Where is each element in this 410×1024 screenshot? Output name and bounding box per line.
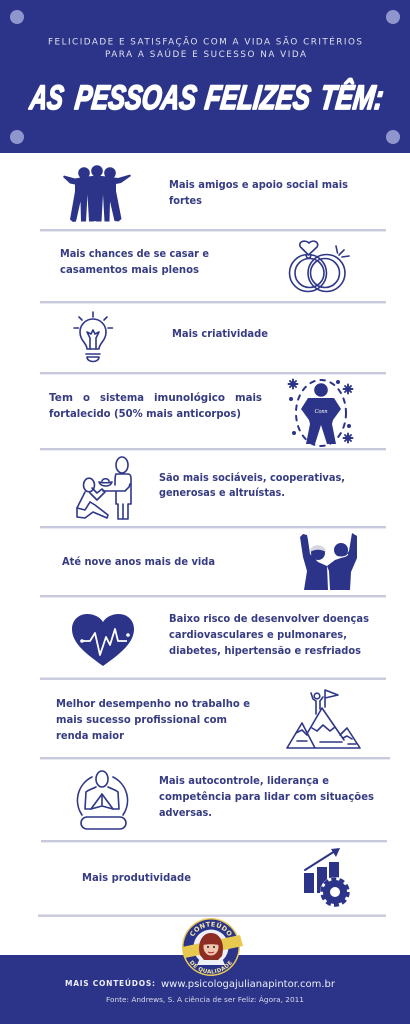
item 4: immune system bbox=[49, 380, 352, 446]
text: Mais amigos e apoio social mais bbox=[169, 179, 348, 191]
text bbox=[169, 613, 369, 657]
text: casamentos mais plenos bbox=[60, 264, 199, 276]
text: diabetes, hipertensão e resfriados bbox=[169, 645, 361, 657]
text: Mais produtividade bbox=[82, 872, 191, 884]
text: mais sucesso profissional com bbox=[56, 714, 227, 726]
text: mais bbox=[235, 392, 262, 404]
text bbox=[56, 698, 250, 742]
source: Fonte: Andrews, S. A ciência de ser Feliz: Ágora, 2011 bbox=[106, 995, 304, 1004]
icon: rising chart and gear bbox=[304, 848, 350, 907]
text: Mais autocontrole, liderança e bbox=[159, 775, 329, 787]
item 8: work bbox=[56, 690, 360, 748]
item 1: friends bbox=[63, 165, 348, 222]
subtitle: FELICIDADE E SATISFAÇÃO COM A VIDA SÃO CRITÉRIOS bbox=[48, 36, 362, 48]
text: fortalecido (50% mais anticorpos) bbox=[49, 408, 241, 420]
text: o bbox=[83, 392, 90, 404]
item 7: heart health bbox=[72, 613, 369, 666]
footer links: MAIS CONTEÚDOS: bbox=[65, 979, 155, 988]
footer links: www.psicologajulianapintor.com.br bbox=[161, 979, 336, 990]
icon: rings with heart bbox=[290, 241, 349, 292]
text: Mais chances de se casar e bbox=[60, 248, 209, 260]
text: sistema bbox=[100, 392, 144, 404]
text bbox=[49, 392, 262, 420]
text bbox=[159, 472, 345, 499]
icon: elderly couple celebrating bbox=[300, 533, 357, 590]
item 6: longevity bbox=[62, 533, 357, 590]
text: generosas e altruístas. bbox=[159, 487, 285, 499]
icon: light bulb bbox=[74, 312, 112, 362]
badge: conteúdo de qualidade bbox=[182, 918, 243, 976]
title bbox=[27, 79, 386, 117]
footer links bbox=[65, 979, 336, 990]
badge: conteúdo de qualidade: DE QUALIDADE bbox=[190, 960, 232, 974]
item 3: creativity bbox=[74, 312, 268, 362]
title: AS bbox=[27, 79, 66, 117]
icon: mountain with flag bbox=[287, 690, 360, 748]
panel: header bbox=[0, 0, 410, 153]
title: TÊM: bbox=[318, 79, 386, 117]
text: competência para lidar com situações bbox=[159, 791, 374, 803]
text: renda maior bbox=[56, 730, 125, 742]
icon: heart with pulse bbox=[72, 614, 134, 666]
text: cardiovasculares e pulmonares, bbox=[169, 629, 347, 641]
text: São mais sociáveis, cooperativas, bbox=[159, 472, 345, 484]
text: Baixo risco de desenvolver doenças bbox=[169, 613, 369, 625]
text: imunológico bbox=[154, 392, 225, 404]
icon: group of friends bbox=[63, 165, 131, 222]
item 2: marriage bbox=[60, 241, 349, 292]
text bbox=[169, 179, 348, 207]
panel: footer bbox=[0, 955, 410, 1024]
text: Até nove anos mais de vida bbox=[62, 556, 215, 568]
text: Melhor desempenho no trabalho e bbox=[56, 698, 250, 710]
subtitle bbox=[48, 36, 362, 60]
text bbox=[159, 775, 374, 819]
badge: conteúdo de qualidade: CONTEÚDO bbox=[190, 922, 232, 936]
icon: strong body with viruses bbox=[288, 380, 352, 446]
item 9: self-control bbox=[77, 771, 374, 829]
text: Mais criatividade bbox=[172, 328, 268, 340]
icon: meditating figure bbox=[77, 771, 128, 829]
text bbox=[60, 248, 209, 276]
item 5: sociable bbox=[77, 457, 345, 519]
title: FELIZES bbox=[203, 79, 313, 117]
item 10: productivity bbox=[82, 848, 350, 907]
text: fortes bbox=[169, 195, 202, 207]
subtitle: PARA A SAÚDE E SUCESSO NA VIDA bbox=[105, 48, 306, 60]
text: Tem bbox=[49, 392, 73, 404]
text: adversas. bbox=[159, 807, 212, 819]
icon: strong body with viruses: Conn bbox=[314, 409, 328, 415]
title: PESSOAS bbox=[73, 79, 199, 117]
icon: person giving food bbox=[77, 457, 131, 519]
